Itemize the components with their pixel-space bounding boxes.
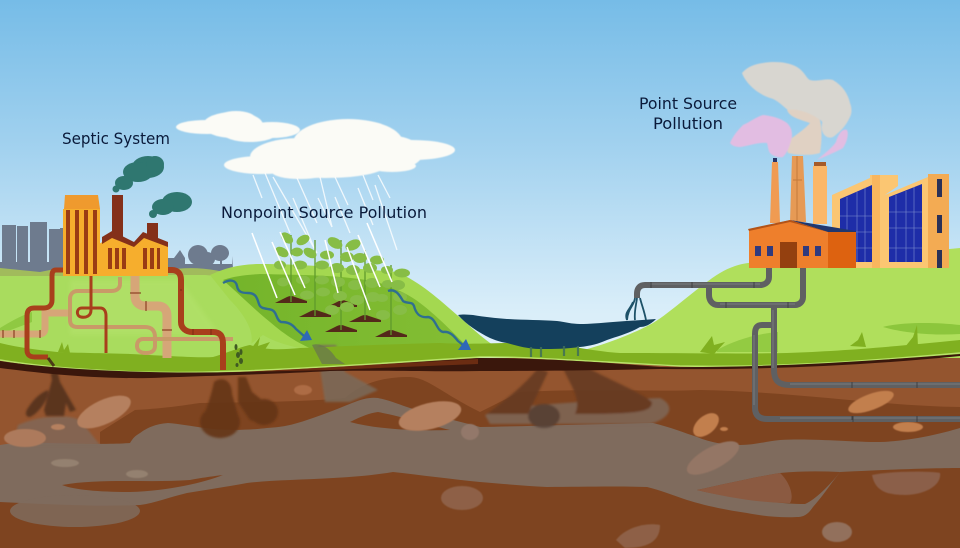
chimneys	[770, 156, 827, 224]
arrowhead	[458, 339, 471, 350]
nonpoint hill inner	[223, 274, 473, 352]
septic pipes tan	[0, 276, 233, 358]
pollution seepage left	[26, 356, 76, 417]
crops	[274, 230, 410, 337]
label: septic system: Septic System	[62, 129, 170, 148]
soil upper layer	[0, 358, 960, 445]
soil island centre	[350, 412, 450, 430]
right hill	[560, 248, 960, 360]
bushes at horizon	[0, 268, 240, 278]
purple smoke	[730, 115, 792, 157]
right hill patches	[717, 323, 960, 352]
pollution at pond edge	[531, 346, 578, 357]
plume halo left	[13, 416, 100, 445]
ground grass strip	[0, 340, 960, 372]
purple smoke right	[817, 130, 848, 160]
label: nonpoint source pollution: Nonpoint Source Pollution	[221, 203, 427, 222]
groundwater contamination plume	[0, 398, 960, 517]
chimneys	[112, 195, 123, 237]
smoke	[112, 156, 192, 218]
beige smoke	[787, 109, 822, 155]
trees silhouette	[168, 245, 233, 274]
runoff arrow left	[223, 281, 312, 341]
dark soil edge	[0, 354, 960, 378]
industrial smoke	[730, 62, 852, 160]
cloud: large	[224, 119, 455, 179]
label: point source pollution: Point Source	[639, 94, 737, 113]
left field highlight	[70, 280, 220, 335]
outfall pipes	[637, 268, 960, 419]
pipe joints	[651, 282, 917, 422]
leaves	[274, 230, 410, 320]
septic pipes rust	[27, 270, 223, 370]
reddish wedge	[245, 359, 478, 372]
runoff arrow right	[388, 290, 471, 350]
septic factory	[63, 156, 192, 276]
pollution seepage pond	[485, 368, 669, 428]
grass tufts	[58, 325, 918, 354]
soil island left	[62, 475, 223, 492]
left wedge	[0, 312, 32, 334]
soil island right	[697, 471, 840, 504]
pollution seepage centre-left	[200, 377, 278, 438]
light band under hill	[240, 335, 312, 352]
pollution seepage mid	[318, 345, 378, 402]
cloud: small	[176, 111, 300, 142]
rocks	[4, 385, 940, 548]
contamination blotch bottom left	[10, 495, 140, 527]
arrowhead	[300, 330, 312, 341]
seepage drops	[234, 344, 243, 367]
pipe discharge into pond	[626, 298, 646, 320]
orange factory building	[748, 220, 856, 268]
label: point source pollution	[639, 94, 737, 133]
grey smoke	[742, 62, 852, 138]
sky background	[0, 0, 960, 360]
nonpoint hill outer	[210, 264, 505, 360]
rain streaks upper	[253, 173, 397, 253]
leak stain	[48, 358, 54, 366]
glass office building	[832, 174, 949, 268]
pipe joints	[3, 290, 211, 338]
soil mounds	[275, 296, 407, 337]
city skyline	[0, 222, 66, 276]
plant stems	[291, 235, 391, 335]
foreground rain	[252, 223, 392, 310]
tall building	[63, 209, 100, 276]
pond	[458, 315, 656, 349]
label: point source pollution: Pollution	[653, 114, 723, 133]
left field	[0, 272, 500, 372]
workshop	[99, 236, 168, 276]
seep at grass edge	[312, 344, 345, 364]
soil lower layer	[0, 377, 960, 548]
grass bright edge	[0, 353, 960, 372]
pipe highlights	[650, 284, 960, 418]
